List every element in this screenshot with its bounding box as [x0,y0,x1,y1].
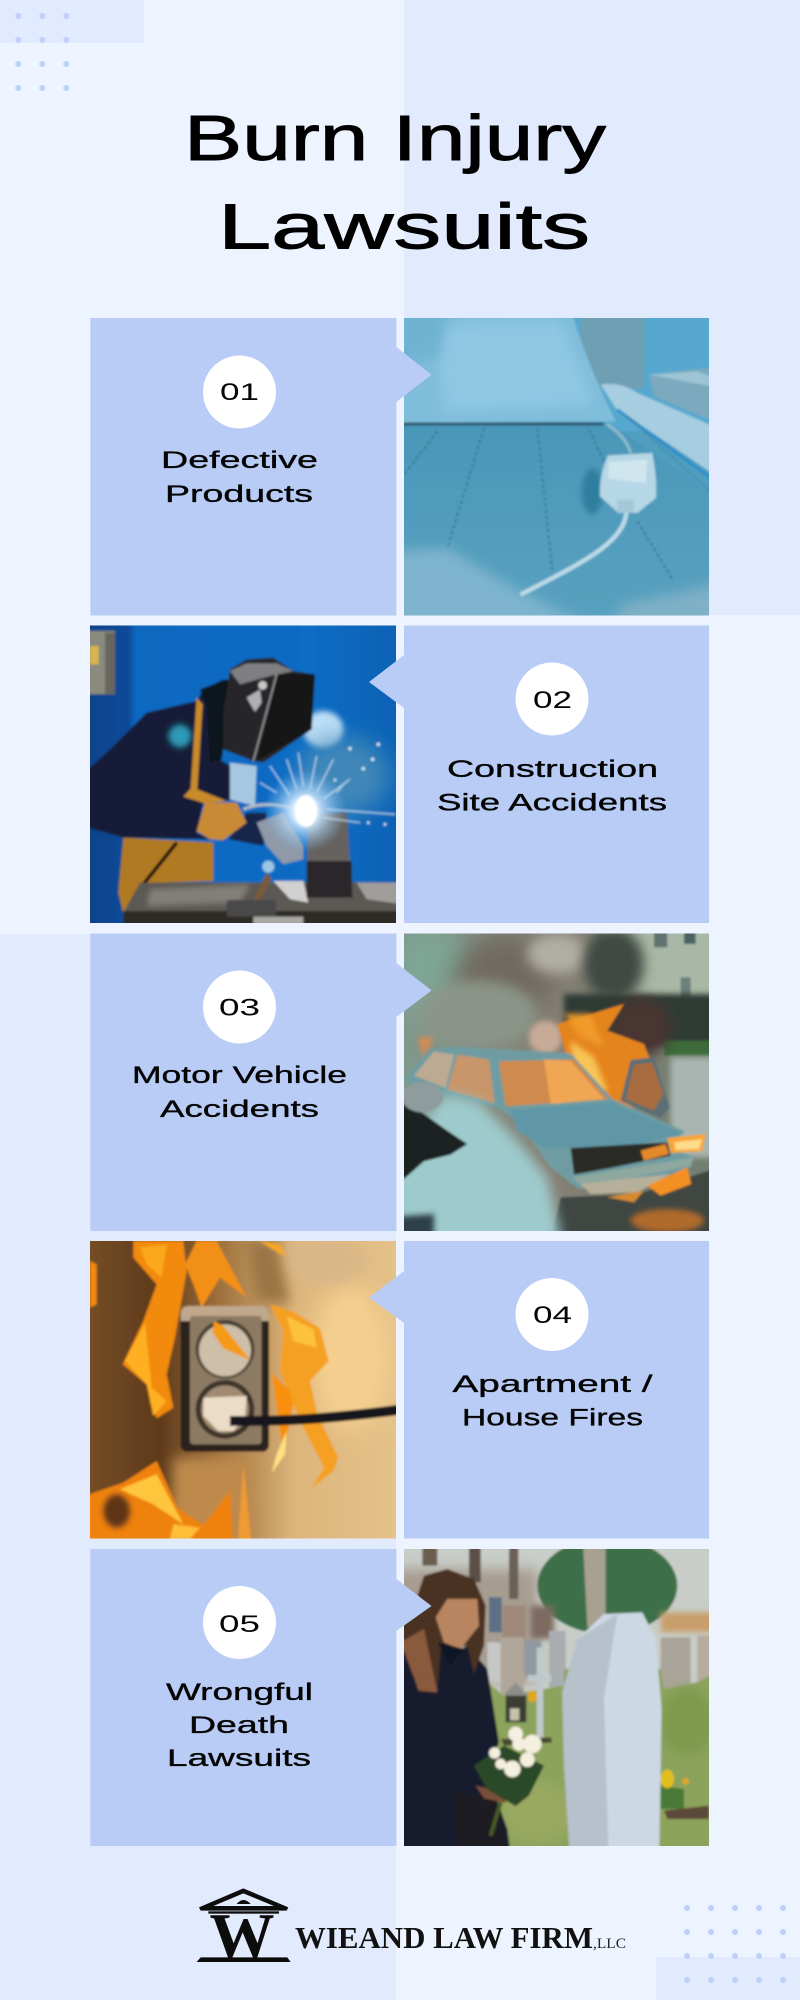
panel: motor vehicle accidents with arrow [90,934,432,1231]
label: construction site accidents [437,756,667,816]
photo: burning wall outlet [90,1241,396,1538]
number badge 05: 05 [219,1611,260,1638]
label: motor vehicle accidents [132,1062,347,1123]
row 2: construction site accidents [90,626,709,923]
panel: apartment house fires with arrow [369,1241,709,1538]
number badge 01 [203,356,276,428]
panel: defective products with arrow [90,318,432,616]
photo: woman at gravestone [404,1549,709,1846]
wordmark: WIEAND LAW FIRM [295,1920,593,1955]
number badge 02: 02 [533,687,572,714]
photo: welder with sparks [90,626,396,923]
icon: temple with W [197,1888,291,1971]
panel: construction site accidents with arrow [369,626,709,923]
title: Burn Injury [184,102,606,174]
number badge 05 [203,1586,276,1659]
number badge 02 [516,662,588,736]
label: apartment house fires: Apartment / [452,1371,653,1398]
title [184,102,606,262]
number badge 01: 01 [220,379,259,406]
label: construction site accidents: Construction [447,756,658,783]
label: wrongful death lawsuits [166,1679,313,1772]
logo: Wieand Law Firm [197,1888,626,1971]
number badge 03: 03 [219,994,260,1022]
label: defective products: Defective [161,447,318,474]
label: defective products: Products [165,481,313,508]
number badge 04 [516,1278,588,1351]
label: wrongful death lawsuits: Wrongful [166,1679,313,1706]
panel: wrongful death lawsuits with arrow [90,1549,432,1846]
photo: burning car [404,934,709,1231]
dot pattern: bottom right [684,1905,786,1983]
number badge 03 [203,970,276,1044]
row 5: wrongful death lawsuits [90,1549,709,1846]
label: wrongful death lawsuits: Lawsuits [167,1745,311,1772]
number badge 04: 04 [533,1302,572,1329]
label: apartment house fires [452,1371,653,1432]
label: apartment house fires: House Fires [462,1404,643,1432]
label: wrongful death lawsuits: Death [189,1712,289,1739]
row 1: defective products [90,318,709,616]
white roses [474,1727,544,1836]
row 3: motor vehicle accidents [90,934,709,1231]
dot pattern: top left [15,13,69,91]
label: defective products [161,447,318,508]
icon: temple with W: W [210,1900,274,1971]
photo: electric blanket with pillow [404,318,709,616]
title: Lawsuits [218,190,590,262]
wordmark suffix: ,LLC [593,1936,626,1952]
label: construction site accidents: Site Accidents [437,790,667,816]
row 4: apartment / house fires [90,1241,709,1538]
label: motor vehicle accidents: Accidents [160,1096,319,1123]
label: motor vehicle accidents: Motor Vehicle [132,1062,347,1089]
